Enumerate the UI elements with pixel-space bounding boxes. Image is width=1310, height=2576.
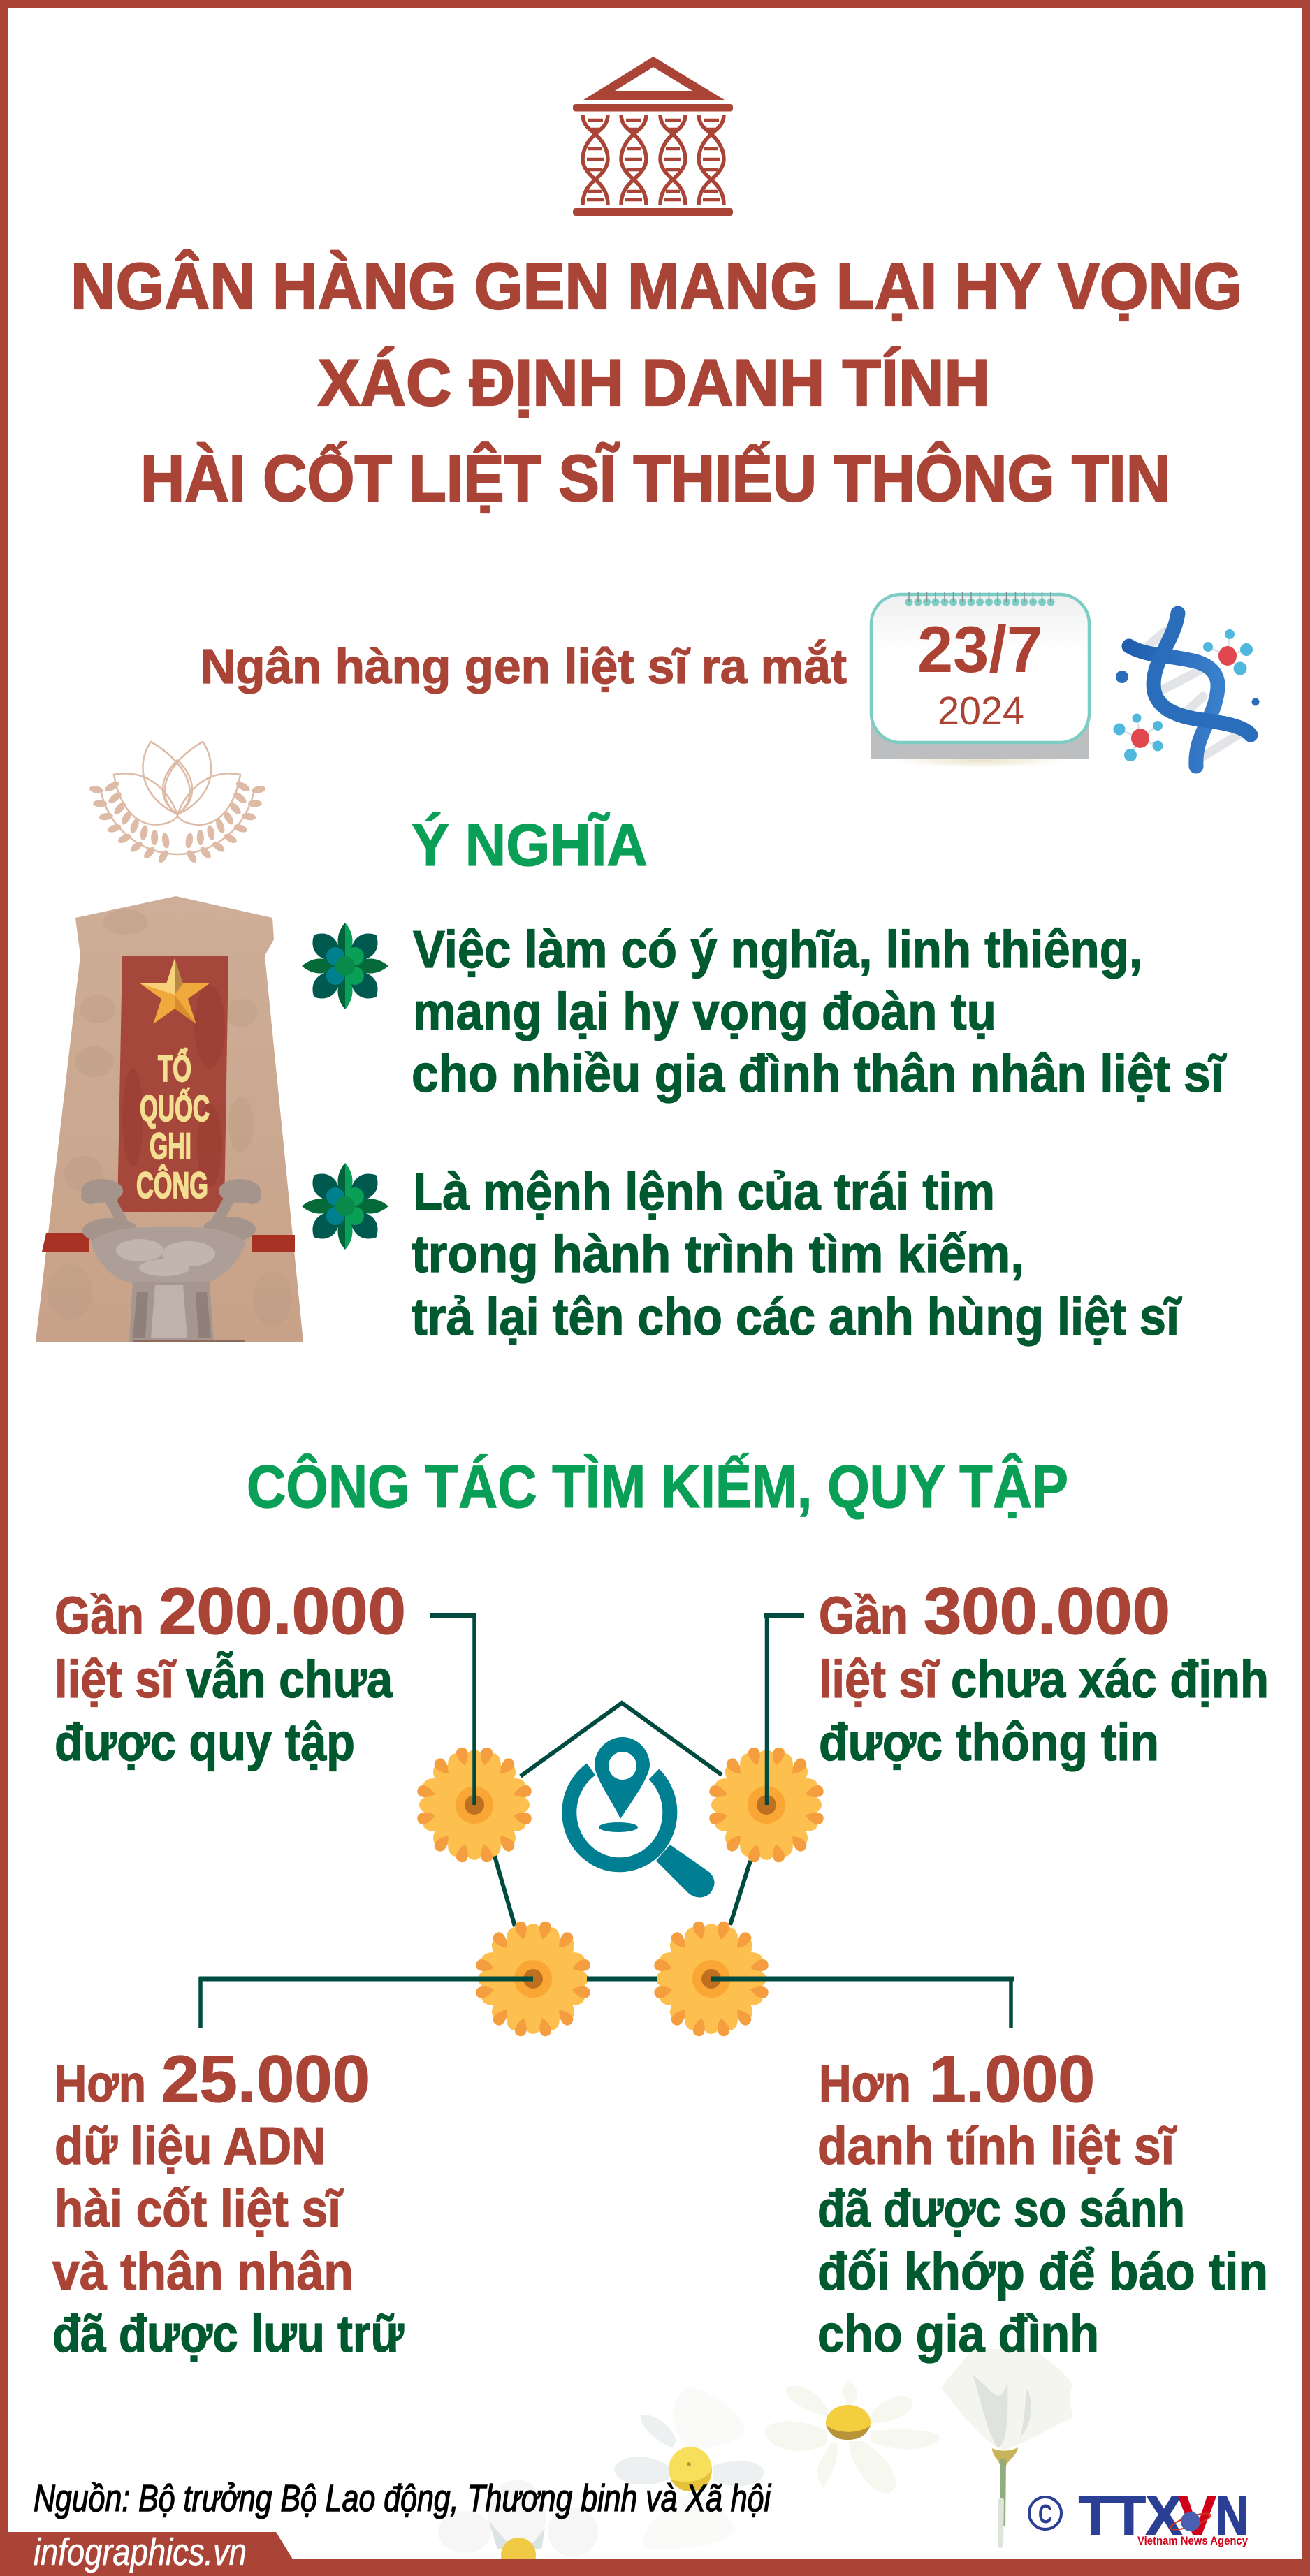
flowers: pentagon nodes: [416, 1746, 825, 2037]
stat: near 200,000: [54, 1574, 406, 1771]
text: meaning 2: trả lại tên cho các anh hùng liệt sĩ: [412, 1287, 1182, 1346]
stat: near 300,000: liệt sĩ: [819, 1650, 940, 1708]
icon: gene bank temple: [573, 57, 733, 216]
stat: over 1,000: Hơn: [819, 2054, 911, 2113]
red strip: [42, 1233, 295, 1252]
stat: over 25,000: hài cốt liệt sĩ: [54, 2179, 344, 2238]
stat: over 25,000: đã được lưu trữ: [52, 2304, 405, 2363]
icon: 3D DNA with molecules: [1114, 613, 1259, 766]
text: meaning 2: Là mệnh lệnh của trái tim: [413, 1162, 995, 1221]
source note: Nguồn: Bộ trưởng Bộ Lao động, Thương binh và Xã hội: [34, 2478, 772, 2519]
stat: near 300,000: [819, 1574, 1269, 1771]
stat: near 300,000: Gần: [819, 1586, 908, 1645]
stat: over 25,000: và thân nhân: [52, 2242, 354, 2301]
icon: copyright: C: [1038, 2500, 1052, 2529]
launch text: Ngân hàng gen liệt sĩ ra mắt: [201, 639, 847, 694]
stat: near 200,000: 200.000: [159, 1574, 406, 1648]
stat: over 1,000: đối khớp để báo tin: [817, 2242, 1268, 2301]
icon: lotus with wreath: [87, 742, 268, 865]
footer band: [0, 2532, 1310, 2576]
stat: over 1,000: danh tính liệt sĩ: [817, 2116, 1177, 2175]
stat: over 1,000: [817, 2042, 1268, 2363]
gold star: [140, 958, 210, 1024]
logo: TTXVN: N: [1216, 2484, 1249, 2547]
icon: copyright: [1029, 2497, 1061, 2529]
stat: near 300,000: chưa xác định: [951, 1650, 1269, 1708]
logo: TTXVN: [1079, 2484, 1249, 2547]
illustration: Tổ quốc ghi công memorial: [36, 896, 303, 1342]
logo: TTXVN: TTX: [1079, 2484, 1182, 2547]
stat: over 25,000: Hơn: [54, 2054, 146, 2113]
logo: TTXVN: V: [1178, 2484, 1216, 2547]
icon: bullet flower 1: [302, 923, 388, 1009]
stat: over 1,000: đã được so sánh: [817, 2179, 1185, 2238]
decoration: pale flowers: [438, 2349, 1074, 2573]
title: HÀI CỐT LIỆT SĨ THIẾU THÔNG TIN: [140, 441, 1170, 515]
stat: over 1,000: 1.000: [929, 2042, 1095, 2116]
stat: near 300,000: 300.000: [924, 1574, 1170, 1648]
logo: TTXVN: Vietnam News Agency: [1137, 2534, 1248, 2547]
plaque text: GHI: [150, 1126, 191, 1167]
stat: near 300,000: được thông tin: [819, 1713, 1159, 1771]
stat: over 25,000: dữ liệu ADN: [54, 2116, 326, 2175]
incense burner: [81, 1179, 261, 1342]
title: [71, 249, 1242, 515]
text: meaning 1: cho nhiều gia đình thân nhân liệt sĩ: [412, 1044, 1227, 1103]
text: meaning 2: [412, 1162, 1182, 1346]
stat: over 25,000: [52, 2042, 405, 2363]
title: NGÂN HÀNG GEN MANG LẠI HY VỌNG: [71, 249, 1242, 323]
stat: over 25,000: 25.000: [161, 2042, 370, 2116]
heading: Ý nghĩa: Ý NGHĨA: [412, 812, 648, 879]
stat: near 200,000: liệt sĩ: [54, 1650, 177, 1708]
connector lines to labels: [199, 1613, 1014, 2028]
footer site name: infographics.vn: [34, 2531, 247, 2573]
plaque text: QUỐC: [140, 1088, 210, 1129]
plaque text: CÔNG: [136, 1164, 208, 1206]
diagram: pentagon connectors: [494, 1703, 750, 1926]
icon: calendar 23/7 2024: 23/7: [917, 613, 1042, 686]
stat: near 200,000: vẫn chưa: [186, 1650, 393, 1708]
stat: over 1,000: cho gia đình: [817, 2304, 1099, 2363]
icon: calendar 23/7 2024: 2024: [938, 689, 1024, 733]
title: XÁC ĐỊNH DANH TÍNH: [318, 346, 990, 419]
icon: bullet flower 2: [302, 1163, 388, 1250]
icon: location search magnifier: [569, 1737, 714, 1898]
text: meaning 1: mang lại hy vọng đoàn tụ: [413, 982, 996, 1041]
text: meaning 2: trong hành trình tìm kiếm,: [412, 1224, 1024, 1283]
text: meaning 1: [412, 920, 1227, 1103]
heading: search and gathering work: CÔNG TÁC TÌM KIẾM, QUY TẬP: [247, 1454, 1068, 1521]
stat: near 200,000: Gần: [54, 1586, 144, 1645]
plaque text: TỔ: [158, 1048, 191, 1090]
text: meaning 1: Việc làm có ý nghĩa, linh thiêng,: [413, 920, 1142, 979]
icon: calendar 23/7 2024: [871, 592, 1089, 768]
stat: near 200,000: được quy tập: [54, 1713, 355, 1771]
red plaque: [117, 956, 228, 1212]
plaque text: [136, 1048, 210, 1206]
